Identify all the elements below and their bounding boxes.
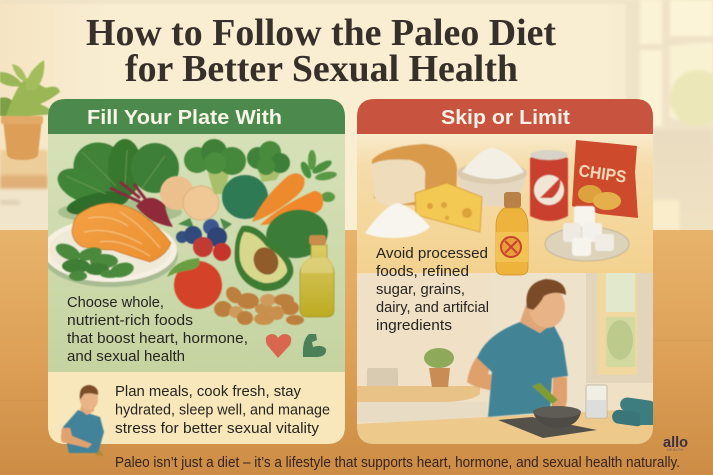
icon: flexed arm — [303, 334, 326, 357]
text: avoid processed foods: ingredients — [376, 317, 452, 334]
text: choose whole foods: nutrient-rich foods — [67, 312, 193, 329]
panel header: red: Skip or Limit — [441, 106, 570, 129]
logo: allo health: HEALTH — [667, 448, 683, 452]
text: avoid processed foods: dairy, and artifcial — [376, 299, 489, 316]
text: avoid processed foods: Avoid processed — [376, 245, 488, 262]
icon: whole avocado — [265, 209, 329, 259]
icon: cheese wedge — [415, 183, 482, 232]
panel header: green — [48, 99, 345, 134]
icon: heart — [266, 334, 291, 358]
icon: chips bag — [572, 140, 638, 218]
icon: bowl of flour — [457, 148, 527, 206]
icon: dark green melon — [222, 175, 268, 219]
text: choose whole foods: and sexual health — [67, 348, 185, 365]
icon: salt pile — [365, 203, 430, 238]
icon: man cooking — [467, 279, 568, 418]
icon: leafy greens — [56, 138, 182, 222]
icon: spinach garnish — [53, 240, 135, 281]
text: avoid processed foods: sugar, grains, — [376, 281, 465, 298]
plant on shelf — [424, 348, 454, 387]
lifestyle tip strip: stress for better sexual vitality — [115, 420, 320, 437]
lifestyle tip strip — [48, 372, 345, 444]
text: avoid processed foods — [376, 245, 489, 334]
icon: yellow bottle with cross — [496, 192, 528, 275]
counter — [357, 408, 653, 444]
icon: eggs — [160, 176, 219, 220]
panel: skip or limit — [357, 99, 657, 444]
icon: salmon on plate — [42, 203, 178, 287]
icon: almonds — [214, 284, 304, 325]
title: for Better Sexual Health — [125, 48, 518, 90]
logo: allo health: allo — [663, 434, 688, 451]
panel header: green: Fill Your Plate With — [87, 106, 282, 129]
text: choose whole foods: Choose whole, — [67, 294, 164, 311]
icon: trivet and pan — [498, 406, 597, 438]
icon: loaf of bread — [371, 144, 457, 206]
icon: sugar cubes on plate — [545, 206, 629, 261]
icon: glass of water — [586, 385, 607, 418]
icon: beet — [110, 182, 173, 227]
title — [86, 12, 556, 90]
panel header: red — [357, 99, 653, 134]
icon: berries — [176, 218, 232, 261]
icon: avocado half — [235, 226, 293, 291]
potted plant — [0, 60, 60, 160]
icon: broccoli — [184, 139, 290, 194]
kitchen scene — [357, 273, 653, 444]
icon: carrots — [252, 150, 338, 225]
lifestyle tip strip: Plan meals, cook fresh, stay — [115, 383, 301, 400]
text: choose whole foods — [67, 294, 248, 365]
icon: apple — [167, 258, 222, 309]
title: How to Follow the Paleo Diet — [86, 12, 556, 54]
text: choose whole foods: that boost heart, hormone, — [67, 330, 248, 347]
icon: soda can — [530, 150, 568, 221]
text: avoid processed foods: foods, refined — [376, 263, 469, 280]
window — [586, 273, 653, 383]
panel: fill your plate with — [42, 99, 345, 444]
icon: olive oil bottle — [300, 235, 334, 317]
lifestyle tip strip: hydrated, sleep well, and manage — [115, 402, 330, 418]
footer message: Paleo isn’t just a diet – it’s a lifestyle that supports heart, hormone, and sexual health naturally. — [115, 455, 680, 471]
icon: chips bag: CHIPS — [577, 161, 628, 187]
icon: man pouring oil small — [61, 385, 104, 456]
icon: rolled towels — [611, 397, 657, 427]
shelf with box — [357, 368, 480, 402]
